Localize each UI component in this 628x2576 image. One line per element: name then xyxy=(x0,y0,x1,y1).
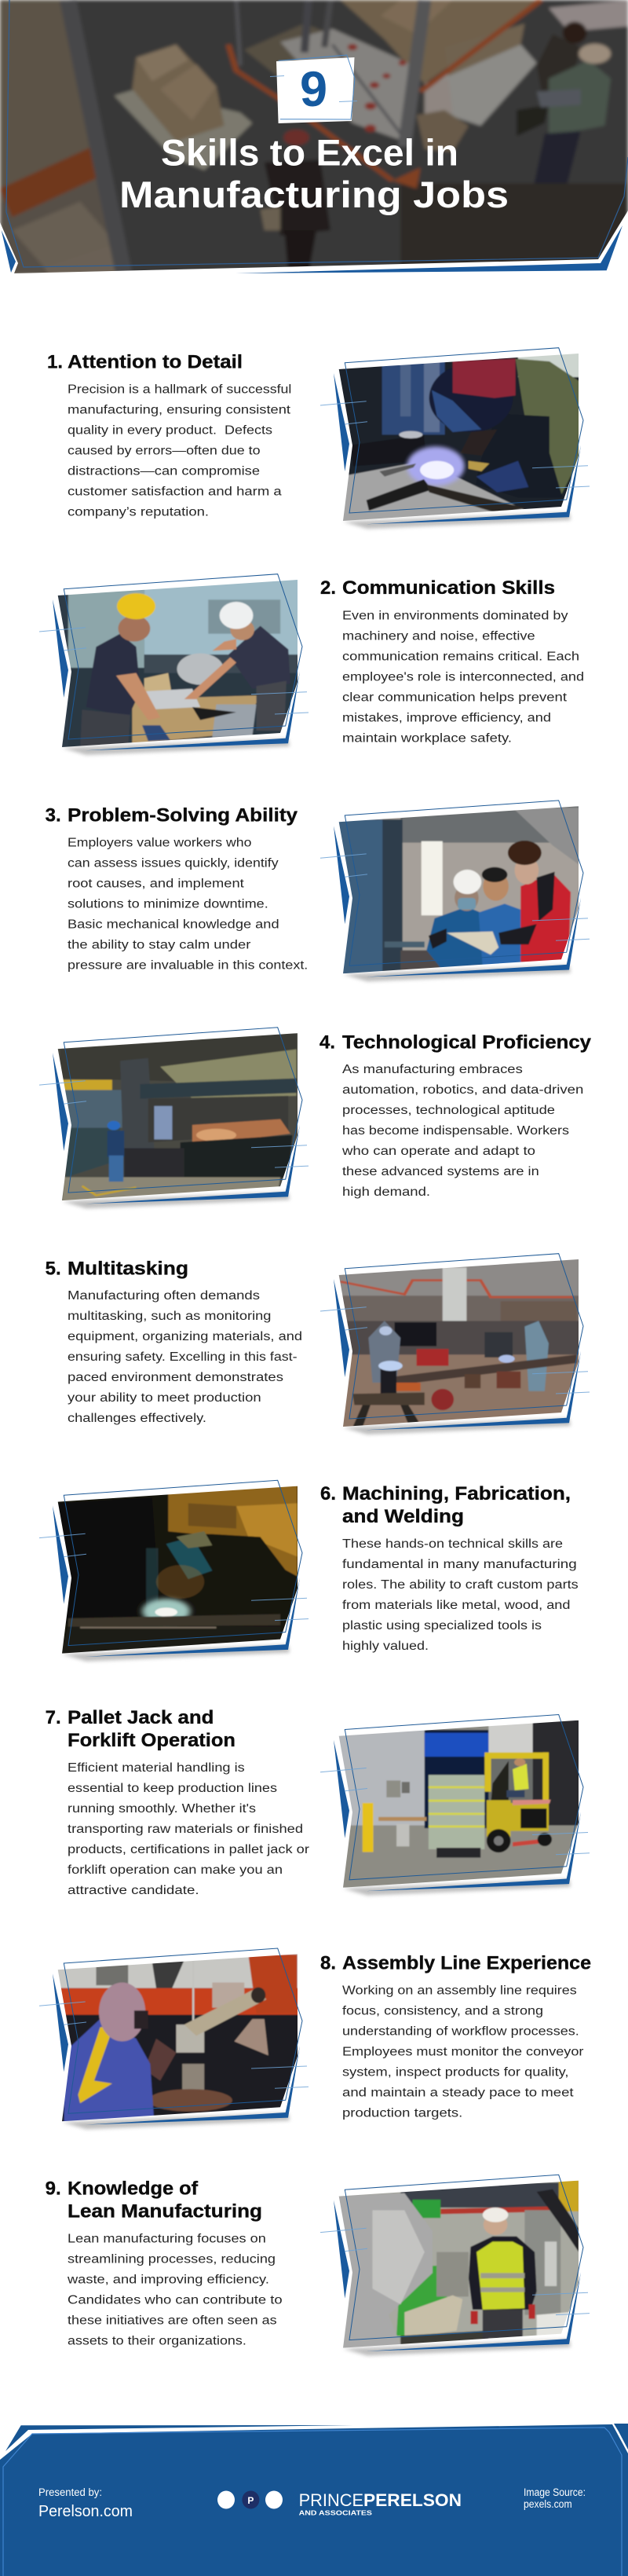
body text 2: employee's role is interconnected, and xyxy=(342,671,584,683)
body text 6: These hands-on technical skills are xyxy=(342,1537,563,1551)
image source: pexels.com xyxy=(524,2498,572,2510)
heading 4: Technological Proficiency xyxy=(342,1031,592,1053)
body text 3: root causes, and implement xyxy=(68,877,245,890)
body text 1: distractions—can compromise xyxy=(68,465,260,478)
body text 7: essential to keep production lines xyxy=(68,1782,277,1795)
photo: factory machine and operator xyxy=(58,1033,298,1200)
heading 6: and Welding xyxy=(342,1506,464,1527)
heading 6: Machining, Fabrication, xyxy=(342,1483,571,1504)
body text 8: and maintain a steady pace to meet xyxy=(342,2086,574,2099)
body text 3: solutions to minimize downtime. xyxy=(68,897,268,911)
photo: welder in dark workshop xyxy=(58,1486,298,1654)
body text 6: highly valued. xyxy=(342,1640,429,1653)
body text 4: automation, robotics, and data-driven xyxy=(342,1083,583,1097)
title xyxy=(119,132,509,215)
body text 7: forklift operation can make you an xyxy=(68,1863,283,1877)
body text 2: Even in environments dominated by xyxy=(342,610,568,622)
body text 3 xyxy=(68,836,308,972)
body text 1: caused by errors—often due to xyxy=(68,445,261,457)
body text 4 xyxy=(341,1063,583,1199)
body text 7: attractive candidate. xyxy=(68,1884,199,1897)
panel: 1 Attention to Detail xyxy=(47,348,590,529)
logo: Prince Perelson and Associates: PERELSON xyxy=(363,2490,462,2510)
header photo: warehouse xyxy=(0,0,628,275)
body text 2: machinery and noise, effective xyxy=(342,630,535,643)
logo: Prince Perelson and Associates: PRINCE xyxy=(299,2490,363,2510)
body text 8: understanding of workflow processes. xyxy=(342,2025,579,2038)
body text 5: Manufacturing often demands xyxy=(68,1289,260,1303)
photo: yellow forklift with pallet xyxy=(339,1720,579,1888)
body text 8: focus, consistency, and a strong xyxy=(342,2004,543,2017)
body text 1: customer satisfaction and harm a xyxy=(68,486,282,498)
body text 5: challenges effectively. xyxy=(68,1412,206,1425)
image frame 7 xyxy=(320,1714,590,1896)
heading 7: Forklift Operation xyxy=(68,1730,236,1751)
logo: Prince Perelson and Associates: AND ASSOCIATES xyxy=(299,2509,372,2517)
body text 5: ensuring safety. Excelling in this fast- xyxy=(68,1350,298,1364)
heading 9 xyxy=(46,2178,262,2222)
presented by xyxy=(38,2486,133,2520)
heading 8: 8. xyxy=(320,1952,336,1973)
body text 6: from materials like metal, wood, and xyxy=(342,1599,570,1612)
presented by: Perelson.com xyxy=(38,2502,133,2520)
image frame 3 xyxy=(320,801,590,982)
header bottom blue accent xyxy=(236,225,623,273)
body text 6: plastic using specialized tools is xyxy=(342,1619,542,1632)
body text 4: As manufacturing embraces xyxy=(342,1063,523,1076)
photo: three workers with tablet xyxy=(339,806,579,974)
body text 7: products, certifications in pallet jack or xyxy=(68,1843,309,1856)
body text 9: Lean manufacturing focuses on xyxy=(68,2233,266,2245)
body text 7 xyxy=(68,1761,309,1897)
image source xyxy=(524,2486,586,2510)
body text 8: Employees must monitor the conveyor xyxy=(342,2045,583,2058)
photo: welder in mauve helmet xyxy=(52,1949,305,2123)
image source: Image Source: xyxy=(524,2486,586,2498)
body text 1: company’s reputation. xyxy=(68,506,209,518)
body text 9: streamlining processes, reducing xyxy=(68,2253,276,2266)
body text 5: paced environment demonstrates xyxy=(68,1371,283,1384)
heading 2: Communication Skills xyxy=(342,577,555,599)
body text 2: clear communication helps prevent xyxy=(342,691,568,704)
heading 1: Attention to Detail xyxy=(68,351,243,372)
body text 8: system, inspect products for quality, xyxy=(342,2065,568,2079)
heading 6: 6. xyxy=(320,1483,336,1504)
photo: worker in hi-vis vest xyxy=(339,2181,579,2347)
heading 9: 9. xyxy=(46,2178,61,2199)
image frame 4 xyxy=(39,1028,309,1209)
body text 4: processes, technological aptitude xyxy=(342,1104,555,1117)
body text 4: has become indispensable. Workers xyxy=(342,1124,569,1138)
body text 7: running smoothly. Whether it's xyxy=(68,1802,256,1816)
footer inner outline xyxy=(3,2428,622,2576)
body text 1: Precision is a hallmark of successful xyxy=(68,383,291,396)
photo: welding workshop floor xyxy=(339,1259,579,1427)
body text 5: equipment, organizing materials, and xyxy=(68,1330,302,1343)
header left blue accent xyxy=(2,230,16,273)
body text 9: waste, and improving efficiency. xyxy=(67,2274,269,2286)
heading 8: Assembly Line Experience xyxy=(342,1952,591,1973)
body text 3: the ability to stay calm under xyxy=(68,938,250,951)
heading 7: 7. xyxy=(46,1707,61,1728)
panel: 3 Problem-Solving Ability xyxy=(46,801,590,982)
title: Skills to Excel in xyxy=(161,132,458,173)
body text 9 xyxy=(67,2233,283,2347)
body text 5: multitasking, such as monitoring xyxy=(68,1310,271,1323)
heading 5: Multitasking xyxy=(68,1259,188,1279)
body text 3: Employers value workers who xyxy=(68,836,251,849)
body text 8: production targets. xyxy=(342,2106,462,2120)
body text 2: maintain workplace safety. xyxy=(342,732,512,745)
body text 8 xyxy=(342,1984,583,2120)
body text 2 xyxy=(342,610,584,745)
body text 2: communication remains critical. Each xyxy=(342,650,579,663)
body text 3: pressure are invaluable in this context. xyxy=(68,958,308,972)
logo: Prince Perelson and Associates xyxy=(217,2490,462,2517)
presented by: Presented by: xyxy=(38,2486,102,2498)
heading 3: 3. xyxy=(46,804,61,826)
footer xyxy=(0,2424,628,2576)
header inner outline xyxy=(6,0,628,267)
image frame 8 xyxy=(39,1948,309,2129)
heading 4: 4. xyxy=(319,1031,335,1053)
image frame 1 xyxy=(320,348,590,529)
body text 6 xyxy=(342,1537,579,1653)
body text 5 xyxy=(68,1289,302,1425)
footer top accent xyxy=(5,2425,353,2451)
body text 3: Basic mechanical knowledge and xyxy=(68,918,279,931)
panel: 6 Machining, Fabrication, and Welding xyxy=(39,1480,579,1662)
image frame 6 xyxy=(39,1480,309,1662)
panel: 9 Knowledge of Lean Manufacturing xyxy=(46,2175,590,2356)
heading 7: Pallet Jack and xyxy=(68,1707,214,1728)
body text 3: can assess issues quickly, identify xyxy=(68,856,279,870)
heading 9: Knowledge of xyxy=(68,2178,199,2199)
body text 9: these initiatives are often seen as xyxy=(68,2314,277,2327)
body text 1 xyxy=(68,383,291,518)
heading 2: 2. xyxy=(320,577,336,599)
body text 7: transporting raw materials or finished xyxy=(68,1823,303,1836)
body text 2: mistakes, improve efficiency, and xyxy=(342,712,551,724)
heading 5: 5. xyxy=(46,1259,61,1279)
heading 1: 1. xyxy=(47,351,63,372)
body text 1: manufacturing, ensuring consistent xyxy=(68,404,291,416)
logo: Prince Perelson and Associates: P xyxy=(247,2495,254,2506)
image frame 5 xyxy=(320,1254,590,1435)
panel: 2 Communication Skills xyxy=(39,574,584,755)
body text 1: quality in every product. Defects xyxy=(68,424,272,437)
panel: 4 Technological Proficiency xyxy=(39,1028,592,1209)
number badge xyxy=(270,55,357,123)
photo: welder with blue sparks xyxy=(335,348,583,526)
photo: two workers at a saw xyxy=(58,580,298,747)
body text 8: Working on an assembly line requires xyxy=(342,1984,577,1997)
footer right accent xyxy=(614,2424,628,2450)
footer background xyxy=(0,2424,628,2576)
body text 9: assets to their organizations. xyxy=(68,2335,246,2347)
heading 7 xyxy=(46,1707,236,1751)
header banner xyxy=(0,0,628,275)
body text 4: high demand. xyxy=(342,1185,430,1199)
image frame 9 xyxy=(320,2175,590,2356)
body text 9: Candidates who can contribute to xyxy=(68,2294,283,2307)
image frame 2 xyxy=(39,574,309,755)
body text 6: fundamental in many manufacturing xyxy=(342,1558,577,1571)
title: Manufacturing Jobs xyxy=(119,174,509,215)
heading 3: Problem-Solving Ability xyxy=(68,804,298,826)
badge number: 9 xyxy=(300,62,327,117)
panel: 7 Pallet Jack and Forklift Operation xyxy=(46,1707,590,1897)
body text 5: your ability to meet production xyxy=(68,1391,261,1405)
heading 9: Lean Manufacturing xyxy=(68,2200,262,2222)
body text 4: these advanced systems are in xyxy=(342,1165,539,1178)
heading 6 xyxy=(320,1483,571,1527)
panel: 8 Assembly Line Experience xyxy=(39,1948,591,2129)
panel: 5 Multitasking xyxy=(46,1254,590,1435)
body text 7: Efficient material handling is xyxy=(68,1761,245,1775)
body text 4: who can operate and adapt to xyxy=(341,1145,535,1158)
body text 6: roles. The ability to craft custom parts xyxy=(342,1578,579,1592)
